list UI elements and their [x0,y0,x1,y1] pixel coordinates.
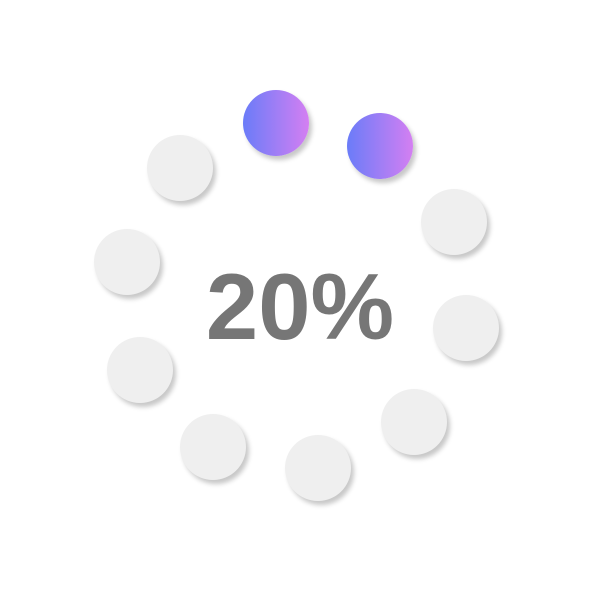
dot 8 [107,337,173,403]
dot 6 [285,435,351,501]
dot 3 [421,189,487,255]
dot: active 2 [347,113,413,179]
dot 10 [147,135,213,201]
dot 9 [94,229,160,295]
dot: active 1 [243,90,309,156]
dot 4 [433,295,499,361]
percentage text: 20% [206,254,394,359]
dot 7 [180,414,246,480]
dot 5 [381,389,447,455]
